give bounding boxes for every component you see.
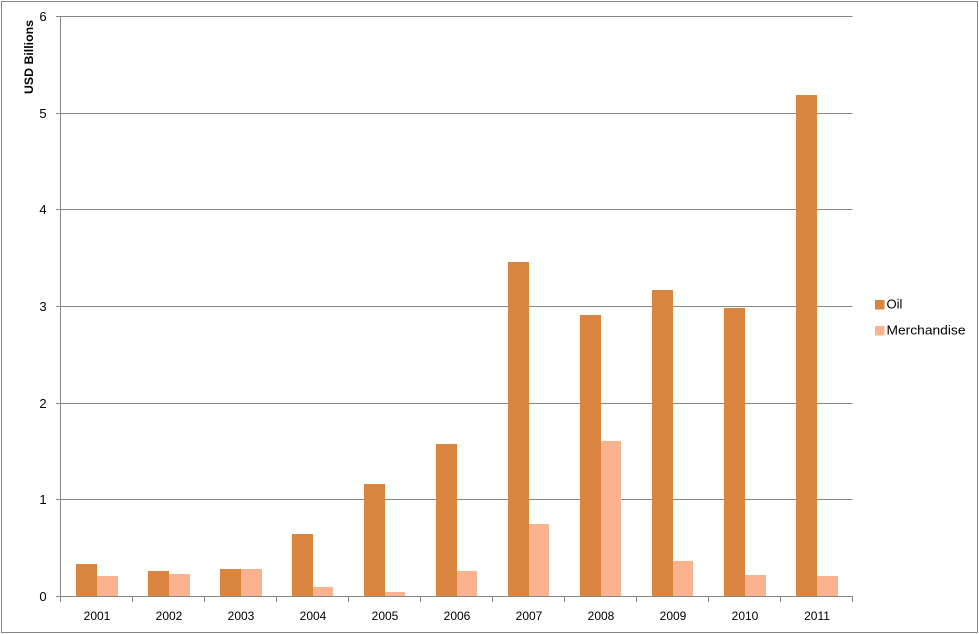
x-axis labels: 2007 — [516, 609, 543, 623]
x-axis labels: 2002 — [156, 609, 183, 623]
y-axis labels: 4 — [39, 202, 47, 217]
x-axis labels: 2006 — [444, 609, 471, 623]
x-axis labels: 2008 — [588, 609, 615, 623]
merchandise bars — [97, 441, 838, 596]
y-axis labels: 2 — [39, 396, 47, 411]
legend: Oil — [886, 296, 902, 312]
axes — [56, 16, 852, 602]
x-axis labels: 2009 — [660, 609, 687, 623]
legend: Merchandise — [886, 322, 966, 338]
x-axis labels: 2011 — [804, 609, 830, 623]
y-axis labels: 1 — [39, 492, 47, 507]
y-axis labels: 5 — [39, 106, 47, 121]
x-axis labels: 2003 — [228, 609, 255, 623]
x-axis labels: 2005 — [372, 609, 399, 623]
x-axis labels: 2001 — [84, 609, 111, 623]
y-axis labels: 0 — [39, 589, 47, 604]
y-axis title: USD Billions — [22, 20, 36, 94]
x-axis labels: 2004 — [300, 609, 327, 623]
y-axis labels — [39, 9, 47, 604]
x-axis labels: 2010 — [732, 609, 759, 623]
y-axis labels: 3 — [39, 299, 47, 314]
oil bars — [76, 95, 817, 596]
x-axis labels — [84, 609, 830, 623]
legend — [875, 296, 966, 338]
y-axis labels: 6 — [39, 9, 47, 24]
